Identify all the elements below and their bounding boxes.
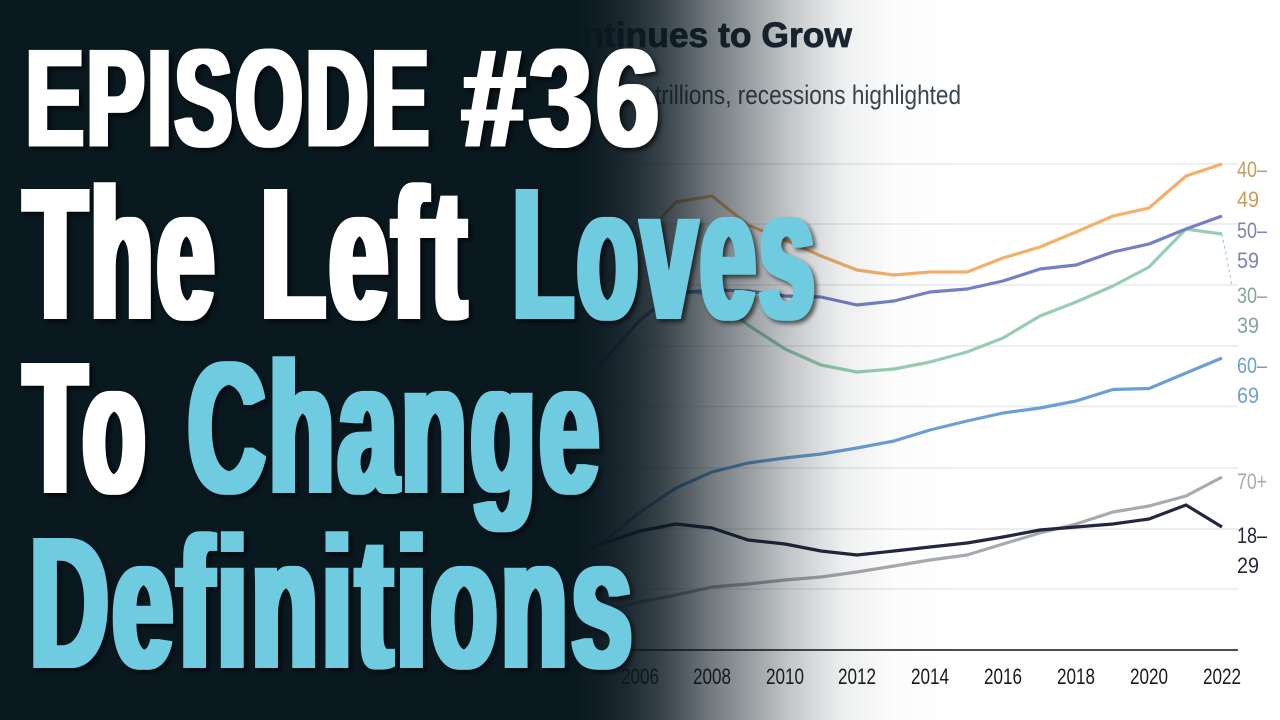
- word: Definitions: Definitions: [30, 500, 636, 707]
- episode heading: #36: [462, 21, 663, 176]
- series labels: 18–: [1237, 523, 1268, 548]
- dashed label connector: [1222, 234, 1232, 285]
- series: age 18-29: [590, 505, 1222, 555]
- series: age 50-59: [600, 216, 1222, 365]
- x axis year labels: 2022: [1203, 664, 1241, 689]
- series: age 30-39: [600, 229, 1222, 372]
- word: To: To: [24, 325, 149, 532]
- series labels: 50–: [1237, 218, 1268, 243]
- series labels: 30–: [1237, 283, 1268, 308]
- series labels: 29: [1237, 553, 1259, 578]
- x axis year labels: 2020: [1130, 664, 1168, 689]
- x axis year labels: 2006: [621, 664, 659, 689]
- chart title: Continues to Grow: [535, 16, 853, 55]
- series labels: 49: [1237, 187, 1259, 212]
- x axis year labels: 2016: [984, 664, 1022, 689]
- x axis year labels: 2018: [1057, 664, 1095, 689]
- line: The Left: The: [24, 151, 218, 358]
- x axis year labels: 2014: [911, 664, 949, 689]
- series: age 70+: [600, 477, 1222, 612]
- headline: [24, 151, 818, 707]
- line: The Left: Left: [261, 151, 470, 358]
- line chart background: [535, 16, 1268, 689]
- series labels: 40–: [1237, 157, 1268, 182]
- x axis line: [600, 649, 1238, 651]
- series labels: 59: [1237, 248, 1259, 273]
- x axis year labels: 2012: [838, 664, 876, 689]
- episode heading: EPISODE: [26, 21, 432, 176]
- series labels: 70+: [1237, 469, 1267, 494]
- series labels: 39: [1237, 313, 1259, 338]
- series: age 60-69: [600, 358, 1222, 545]
- x axis year labels: 2008: [693, 664, 731, 689]
- series labels: 69: [1237, 383, 1259, 408]
- word: Loves: Loves: [513, 151, 818, 358]
- x axis year labels: [621, 664, 1241, 689]
- chart subtitle: trillions, recessions highlighted: [655, 80, 961, 110]
- x axis year labels: 2010: [766, 664, 804, 689]
- word: Change: Change: [188, 325, 603, 532]
- series labels: 60–: [1237, 353, 1268, 378]
- series: age 40-49: [600, 164, 1222, 290]
- series labels: [1237, 157, 1268, 578]
